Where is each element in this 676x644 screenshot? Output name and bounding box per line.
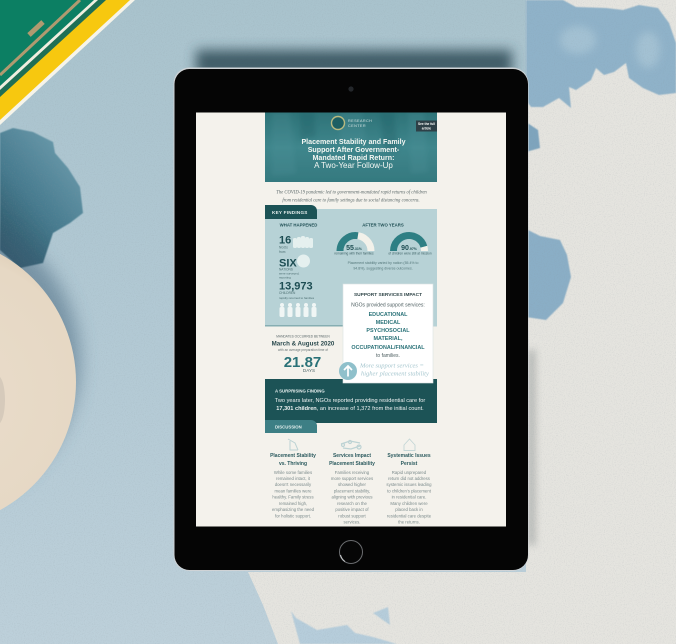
gauge: 90.97%: 90.97% (401, 245, 418, 252)
column: placement stability vs thriving: remained high, (279, 501, 307, 506)
title (301, 138, 406, 170)
what happened: NGOs (279, 246, 288, 250)
panel: a surprising finding: Two years later, NGOs reported providing residential care for (275, 398, 425, 404)
column: services impact placement stability: positive impact of (335, 507, 369, 512)
column: placement stability vs thriving: While some families (274, 470, 312, 475)
panel: support services impact: More support services = (359, 362, 424, 370)
intro text (276, 190, 427, 204)
column: systematic issues persist: to children's placement (387, 488, 432, 494)
column: placement stability vs thriving: mean families were (274, 488, 312, 494)
icon: globe (297, 254, 310, 268)
column: placement stability vs thriving: remained intact, it (276, 476, 311, 481)
timing stat: MANDATES OCCURRED BETWEEN (276, 334, 330, 338)
column: services impact placement stability: robust support (338, 514, 367, 518)
icon: children row (280, 303, 316, 317)
header banner (265, 112, 437, 182)
what happened: NATIONS (279, 268, 293, 272)
title: Placement Stability and Family (301, 138, 406, 146)
what happened: were surveyed, (279, 272, 300, 276)
column: services impact placement stability: Families receiving (335, 470, 370, 475)
green book with yellow edge (0, 0, 135, 125)
discussion tab (265, 420, 317, 433)
timing stat: DAYS (303, 368, 315, 373)
panel: key findings (265, 205, 437, 326)
column: placement stability vs thriving: emphasizing the need (272, 507, 315, 512)
tablet (174, 50, 528, 571)
column: services impact placement stability: placement stability, (334, 488, 370, 494)
column: systematic issues persist: Persist (401, 461, 418, 467)
column: systematic issues persist: Many children were (390, 501, 428, 506)
what happened: from (279, 250, 286, 254)
column: placement stability vs thriving: doesn't necessarily (275, 482, 312, 487)
icon: house outline (288, 439, 298, 450)
panel: a surprising finding: A SURPRISING FINDING (275, 388, 325, 394)
column: services impact placement stability: showed higher (338, 482, 367, 487)
what happened: rapidly returned to families (279, 296, 315, 300)
gauge: 55.31% (334, 236, 374, 256)
what happened: SIX (279, 258, 297, 270)
what happened: 13,973 (279, 280, 313, 292)
panel: support services impact: EDUCATIONAL (369, 312, 408, 318)
badge: See the full (418, 122, 435, 126)
panel: support services impact: NGOs provided support services: (351, 302, 425, 308)
panel: support services impact: to families. (376, 353, 400, 359)
panel: support services impact: MATERIAL, (374, 336, 403, 342)
panel: support services impact: OCCUPATIONAL/FINANCIAL (351, 345, 425, 351)
timing stat: March & August 2020 (272, 340, 335, 348)
column: systematic issues persist: in residential care. (392, 494, 426, 500)
discussion tab: DISCUSSION (275, 424, 302, 430)
column: placement stability vs thriving: healthy. Family stress (272, 494, 314, 500)
badge (416, 120, 437, 132)
column: placement stability vs thriving: for holistic support. (275, 514, 311, 518)
logo: CENTER (348, 124, 366, 128)
panel: a surprising finding: 17,301 children, an increase of 1,372 from the initial count. (276, 406, 424, 412)
gauge: 90.97% (388, 235, 432, 256)
icon: buildings (293, 236, 313, 248)
panel: support services impact: higher placement stability (361, 370, 429, 378)
after two years: Placement stability varied by nation (55.4% to (348, 261, 418, 265)
column: placement stability vs thriving: vs. Thriving (279, 461, 307, 467)
screen (196, 112, 506, 526)
column: systematic issues persist: residential care despite (387, 514, 432, 518)
column: placement stability vs thriving: Placement Stability (270, 453, 316, 459)
timing stat: 21.87 (284, 354, 321, 371)
key findings tab: KEY FINDINGS (272, 210, 308, 215)
gauge: 90.97%: of children were still at mission (388, 252, 432, 256)
column: systematic issues persist: the returns. (398, 520, 420, 524)
icon: home button (340, 540, 362, 564)
column: systematic issues persist: Rapid unprepared (392, 470, 427, 475)
column: systematic issues persist: placed back in (395, 507, 423, 512)
what happened: 16 (279, 234, 291, 246)
plate (0, 214, 80, 528)
what happened: CHILDREN (279, 291, 296, 295)
what happened: reporting (279, 276, 291, 280)
intro text: The COVID-19 pandemic led to government-mandated rapid returns of children (276, 190, 427, 196)
what happened: WHAT HAPPENED (280, 222, 317, 228)
infographic on screen (265, 112, 437, 524)
after two years: 94.8%), suggesting diverse outcomes. (353, 266, 413, 270)
panel: a surprising finding (265, 379, 437, 423)
column: systematic issues persist: systemic issues leading (386, 482, 432, 487)
icon: up arrow (339, 362, 357, 380)
key findings tab (265, 205, 317, 219)
panel: support services impact: SUPPORT SERVICES IMPACT (354, 292, 422, 298)
title: Support After Government- (308, 146, 400, 154)
after two years: AFTER TWO YEARS (362, 222, 404, 228)
column: services impact placement stability: research on the (337, 501, 368, 506)
logo (332, 116, 372, 130)
after two years (334, 222, 432, 270)
icon: house (404, 439, 415, 450)
column: services impact placement stability (329, 440, 375, 524)
column: services impact placement stability: services. (344, 520, 360, 524)
badge: article (422, 126, 431, 130)
column: services impact placement stability: Placement Stability (329, 461, 375, 467)
gauge: 55.31%: 55.31% (346, 245, 363, 252)
column: services impact placement stability: aligning with previous (331, 494, 373, 500)
what happened (279, 222, 317, 317)
column: systematic issues persist (386, 439, 432, 524)
column: placement stability vs thriving (270, 439, 316, 518)
timing stat: with an average preparation time of (278, 348, 328, 352)
timing stat (272, 334, 335, 373)
title: Mandated Rapid Return: (313, 154, 394, 162)
intro text: from residential care to family settings due to social distancing concerns. (282, 198, 420, 204)
panel: support services impact (339, 284, 433, 383)
column: services impact placement stability: Services Impact (333, 453, 371, 459)
column: systematic issues persist: Systematic Issues (387, 453, 431, 459)
column: services impact placement stability: more support services (331, 476, 373, 481)
icon: camera (348, 86, 354, 92)
logo: RESEARCH (348, 119, 372, 123)
panel: support services impact: MEDICAL (376, 320, 401, 326)
title: A Two-Year Follow-Up (314, 161, 393, 170)
panel: support services impact: PSYCHOSOCIAL (366, 328, 410, 334)
icon: network (341, 440, 361, 449)
gauge: 55.31%: remaining with their families (334, 252, 374, 256)
column: systematic issues persist: return did not address (388, 476, 430, 481)
